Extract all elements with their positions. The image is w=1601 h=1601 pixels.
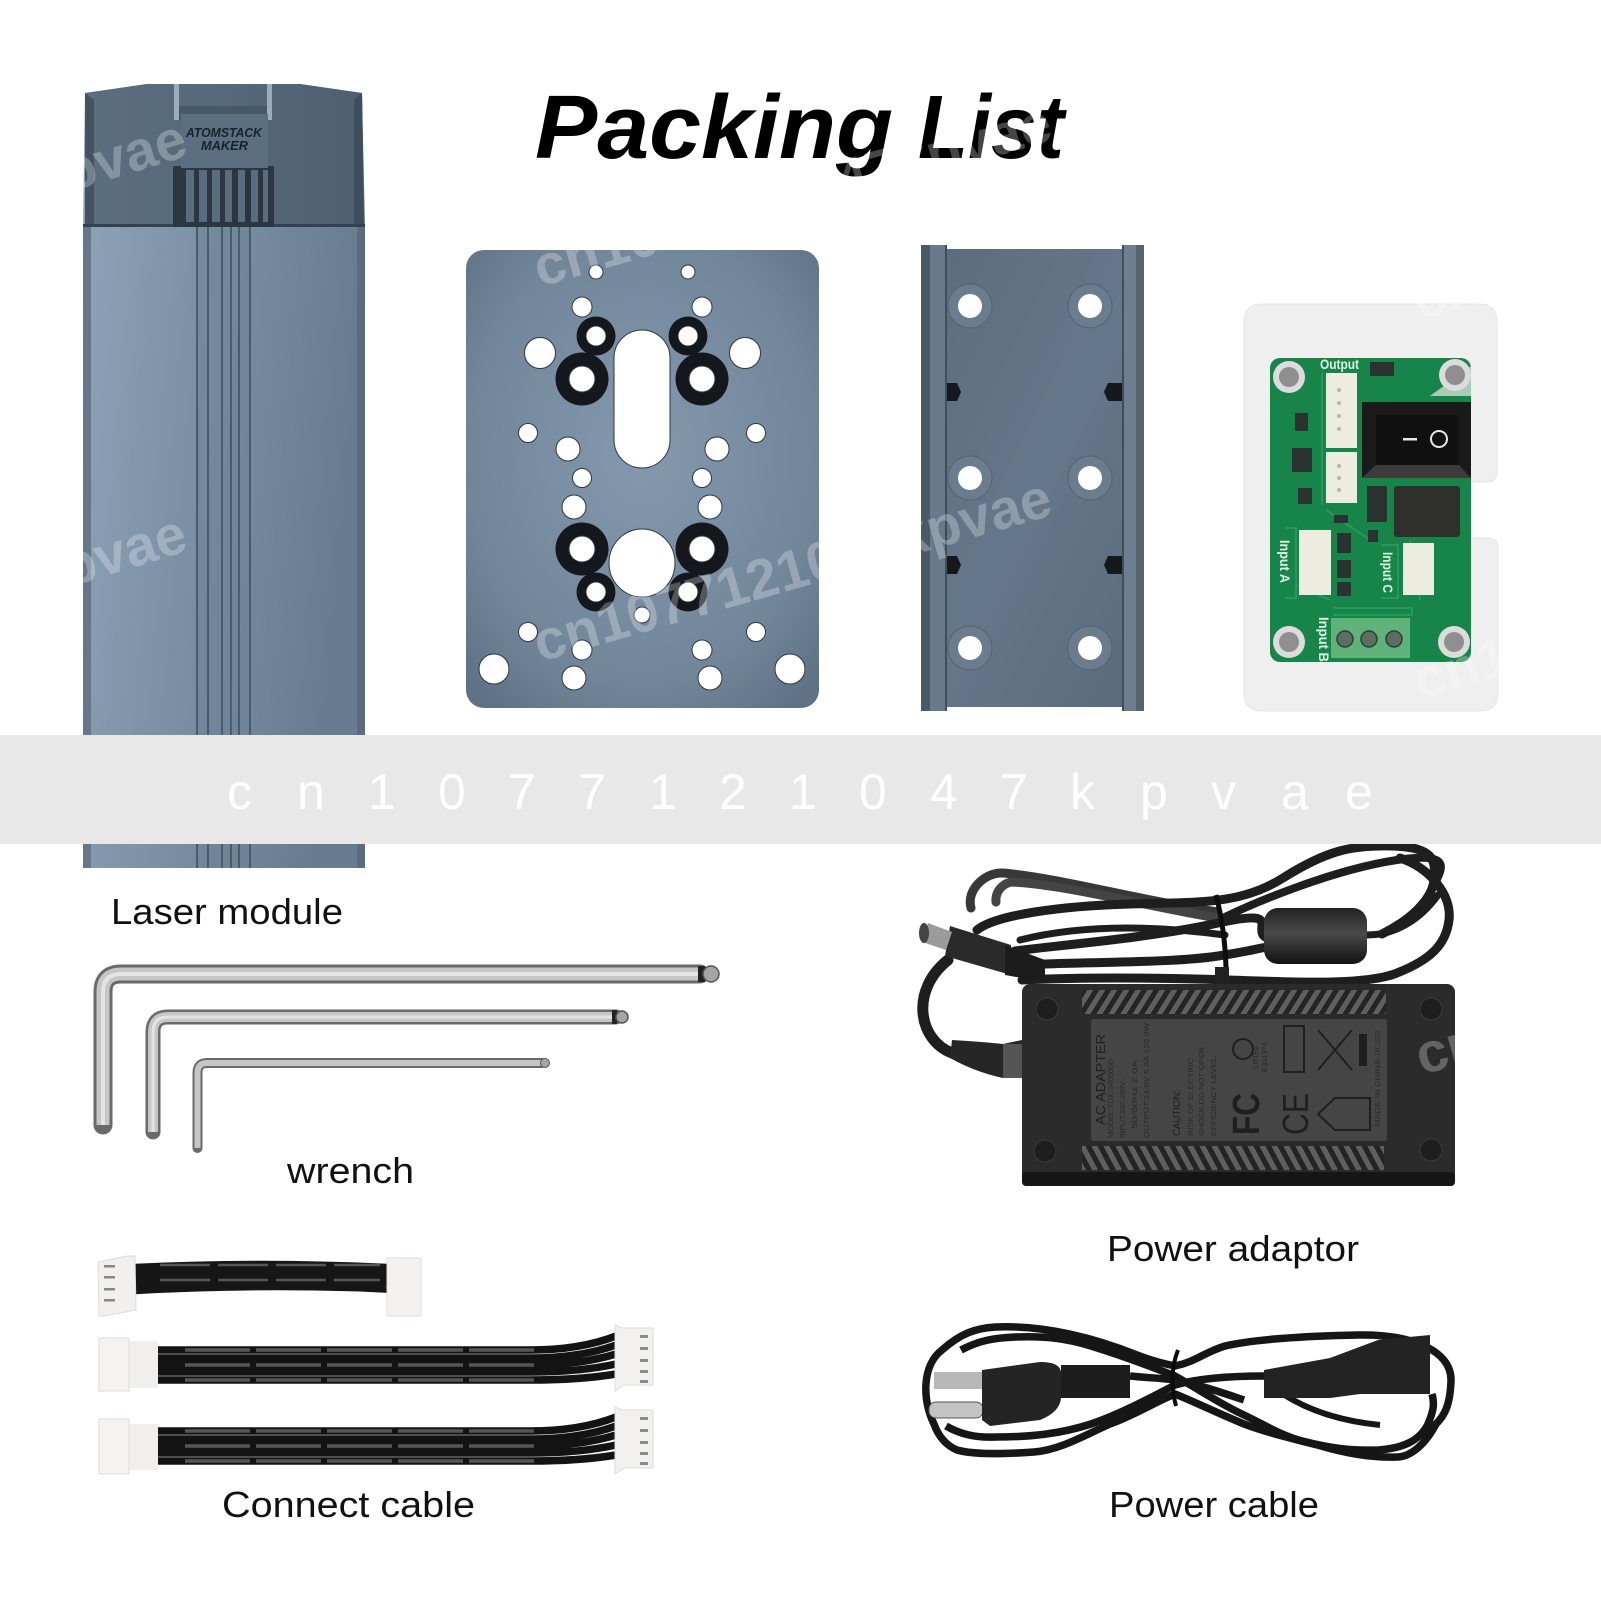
board labels: Input B [1316, 617, 1332, 662]
label: power adaptor: Power adaptor [1107, 1228, 1359, 1269]
watermark banner: cn1077121047kpvae [227, 764, 1373, 820]
panel: mounting plate [466, 250, 819, 708]
cable tie [1172, 1350, 1178, 1406]
logo [185, 126, 263, 153]
adaptor rating label: CAUTION: [1172, 1090, 1183, 1136]
plug body [982, 1362, 1061, 1426]
adaptor rating label: INPUT:100-240V~ [1120, 1077, 1127, 1138]
title [535, 78, 1068, 178]
adaptor rating label: E361974 [1262, 1042, 1269, 1072]
output connectors: Output [1320, 356, 1359, 372]
appliance connector [1264, 1335, 1430, 1398]
input connectors [1299, 530, 1434, 595]
watermarks: cn1077121047kpvae [526, 90, 1058, 299]
adaptor cable coil [923, 846, 1449, 1053]
icon: hex wrenches [103, 966, 719, 1148]
logo: ATOMSTACK [185, 126, 263, 140]
rail holes [948, 284, 1112, 670]
corner screws [1273, 359, 1471, 658]
watermarks: cn1077121047kpvae [526, 465, 1058, 674]
icon: short connect cable [98, 1256, 421, 1316]
DC plug [919, 923, 1045, 982]
strain relief [950, 1040, 1022, 1078]
certification marks [1233, 1026, 1370, 1130]
icon: long connect cable A [99, 1325, 653, 1391]
watermarks [0, 90, 1601, 1087]
label: laser module: Laser module [111, 891, 343, 932]
adaptor rating label: MADE IN CHINA [1375, 1059, 1382, 1127]
adaptor rating label: D/C:2203 [1375, 1031, 1382, 1055]
board labels [1277, 540, 1396, 662]
adaptor rating label: MODEL:TDX-2405000 [1108, 1060, 1115, 1138]
watermark banner [0, 735, 1601, 844]
rail pegs [947, 383, 1122, 574]
adaptor body [1022, 984, 1455, 1186]
circuit board [1270, 356, 1471, 662]
adaptor rating label: SHOCK DO NOT OPEN [1199, 1047, 1206, 1136]
adaptor rating label: CE [1275, 1093, 1316, 1135]
panel: control board in acrylic case [1244, 304, 1498, 711]
panel: laser module [83, 84, 365, 868]
adaptor rating label: FC [1226, 1093, 1268, 1135]
adaptor rating label: AC ADAPTER [1093, 1034, 1108, 1125]
inductor [1394, 486, 1460, 537]
adaptor rating label: LISTED [1253, 1046, 1260, 1068]
output connectors [1320, 356, 1359, 503]
rocker switch [1362, 402, 1471, 478]
small components [1292, 362, 1394, 596]
through holes [479, 265, 805, 690]
cable tie [1216, 895, 1226, 968]
adaptor rating label: 50/60Hz 2.0A [1132, 1059, 1139, 1129]
icon: power cable [926, 1327, 1451, 1457]
power cable loops [926, 1327, 1451, 1457]
title: List [918, 78, 1068, 178]
board labels: Input A [1277, 540, 1293, 583]
panel: mounting rail [921, 245, 1144, 711]
icon: power adaptor [919, 846, 1455, 1186]
board labels: Input C [1380, 552, 1396, 593]
screw terminal [1331, 618, 1410, 658]
countersunk holes [556, 316, 728, 612]
adaptor rating label: OUTPUT:24.0V 5.0A 120.0W [1144, 1022, 1151, 1138]
label: wrench: wrench [286, 1150, 414, 1191]
plug prongs [929, 1372, 983, 1418]
title: Packing [535, 78, 893, 178]
adaptor rating label: RISK OF ELECTRIC [1188, 1058, 1195, 1136]
ferrite bead [1264, 908, 1367, 964]
label: connect cable: Connect cable [222, 1484, 475, 1525]
bracket and fins [173, 84, 274, 227]
label: power cable: Power cable [1109, 1484, 1319, 1525]
adaptor rating label: EFFICIENCY LEVEL: [1211, 1055, 1218, 1136]
logo: MAKER [201, 139, 248, 153]
adaptor rating label [1093, 1022, 1382, 1138]
icon: long connect cable B [99, 1407, 653, 1474]
